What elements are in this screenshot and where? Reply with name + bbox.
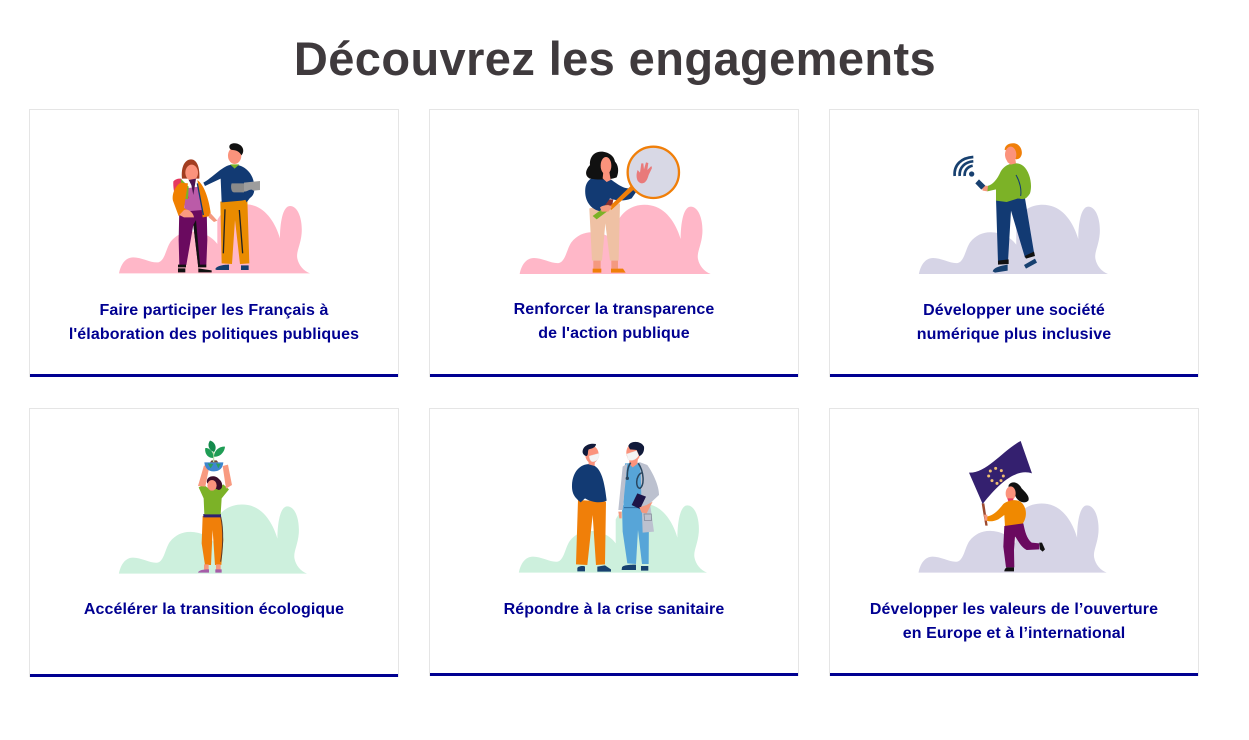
illustration: woman holding plant and globe	[119, 441, 307, 574]
illustration: two people talking	[119, 143, 310, 273]
card: Renforcer la transparence	[429, 109, 799, 377]
card label: Faire participer: Faire participer les Français à	[100, 302, 328, 319]
card label: société numérique	[917, 302, 1111, 343]
card label: Faire participer	[69, 302, 359, 343]
card label: transition écologique: Accélérer la transition écologique	[84, 601, 344, 618]
card label: Renforcer la transparence	[514, 301, 714, 342]
title: Découvrez les engagements	[294, 32, 936, 85]
card: Développer une société numérique	[829, 109, 1199, 377]
card label: valeurs de l'ouverture: Développer les valeurs de l’ouverture	[870, 601, 1158, 618]
card label: société numérique: numérique plus inclusive	[917, 326, 1111, 343]
card label: société numérique: Développer une société	[923, 302, 1105, 319]
illustration: woman with magnifying glass	[520, 147, 711, 274]
card label: Renforcer la transparence: Renforcer la transparence	[514, 301, 714, 318]
illustration: man with phone and wifi	[919, 143, 1108, 274]
card label: valeurs de l'ouverture: en Europe et à l’international	[903, 625, 1125, 642]
illustration: man and doctor with masks	[519, 442, 707, 573]
card: Répondre à la crise	[429, 408, 799, 676]
card label: Renforcer la transparence: de l'action publique	[538, 325, 690, 342]
illustration: woman with European flag	[919, 441, 1107, 573]
card label: Faire participer: l'élaboration des politiques publiques	[69, 326, 359, 343]
card label: crise sanitaire: Répondre à la crise sanitaire	[504, 601, 724, 618]
card: Accélérer la transition	[29, 408, 399, 677]
card: Faire participer	[29, 109, 399, 377]
card: Développer les valeurs	[829, 408, 1199, 676]
card label: valeurs de l'ouverture	[870, 601, 1158, 642]
